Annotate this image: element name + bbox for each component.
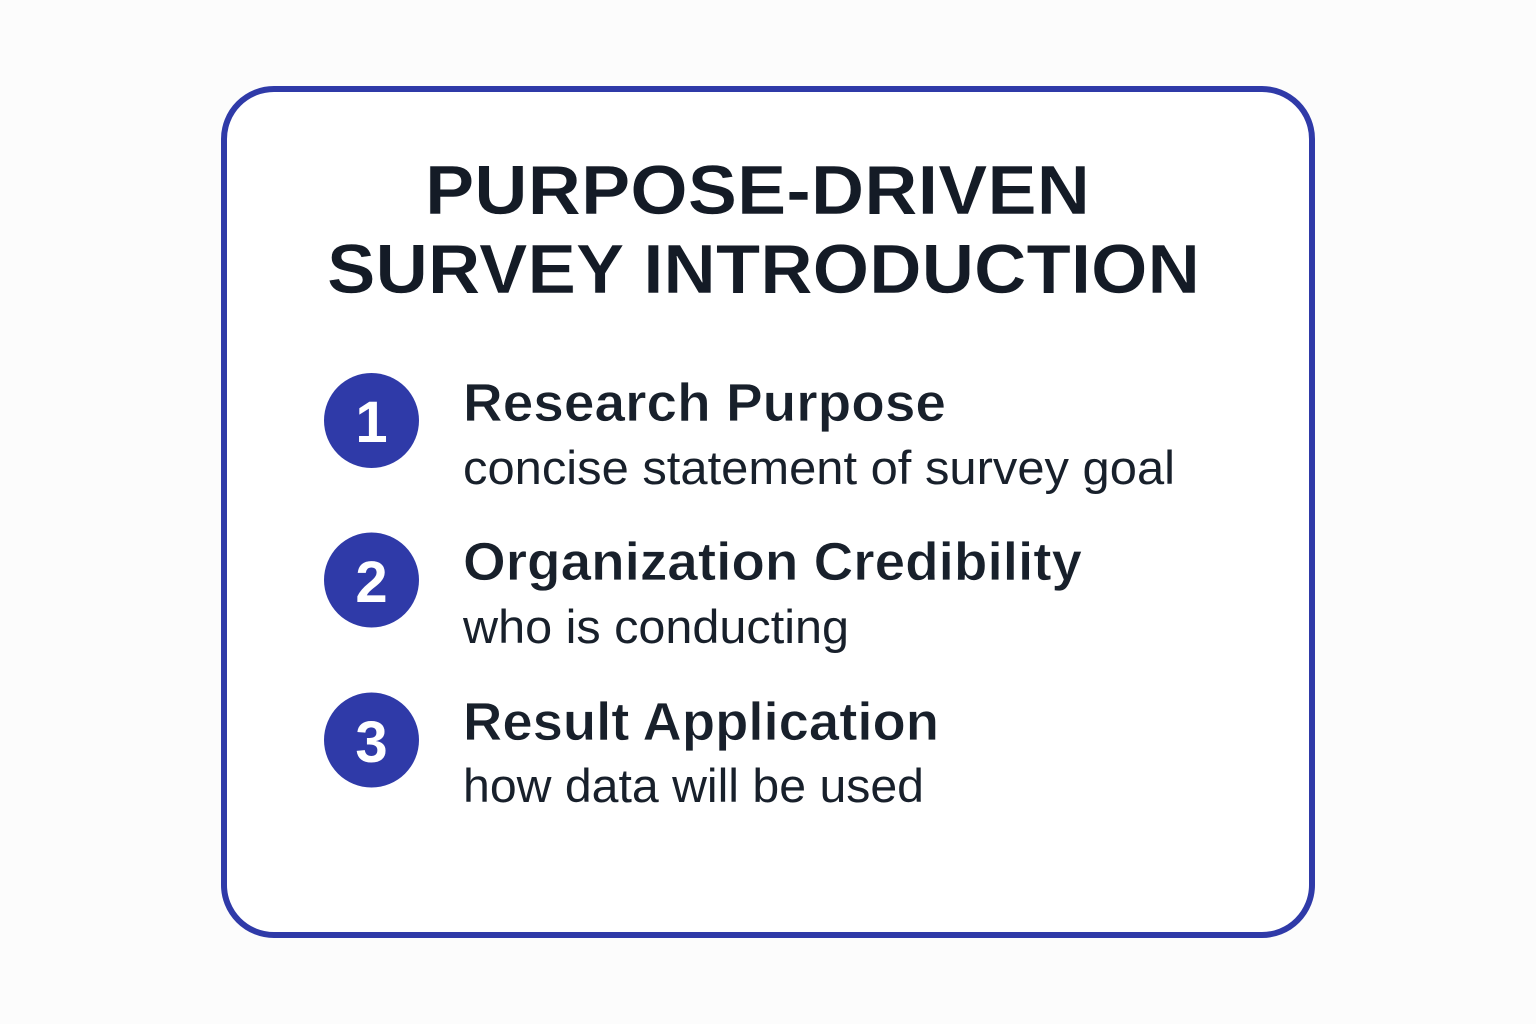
- heading: result application: Result Application: [463, 693, 939, 752]
- title: PURPOSE-DRIVEN: [425, 151, 1090, 229]
- item 1: research purpose: [324, 373, 1175, 494]
- heading: research purpose: Research Purpose: [463, 374, 946, 433]
- icon: number 1 badge: [324, 373, 419, 468]
- icon: number 2 badge: [324, 532, 419, 628]
- icon: number 1 badge: 1: [355, 390, 388, 455]
- icon: number 3 badge: [324, 692, 419, 788]
- icon: number 3 badge: 3: [355, 710, 388, 775]
- text: organization credibility description: who is conducting: [462, 600, 849, 653]
- item 3: result application: [324, 692, 939, 812]
- panel: card: [224, 89, 1312, 935]
- heading: organization credibility: Organization Credibility: [463, 533, 1082, 592]
- item 2: organization credibility: [324, 532, 1082, 653]
- icon: number 2 badge: 2: [355, 550, 388, 615]
- title: SURVEY INTRODUCTION: [327, 230, 1200, 308]
- text: result application description: how data will be used: [463, 759, 924, 812]
- text: research purpose description: concise statement of survey goal: [463, 441, 1175, 494]
- title: [327, 151, 1200, 308]
